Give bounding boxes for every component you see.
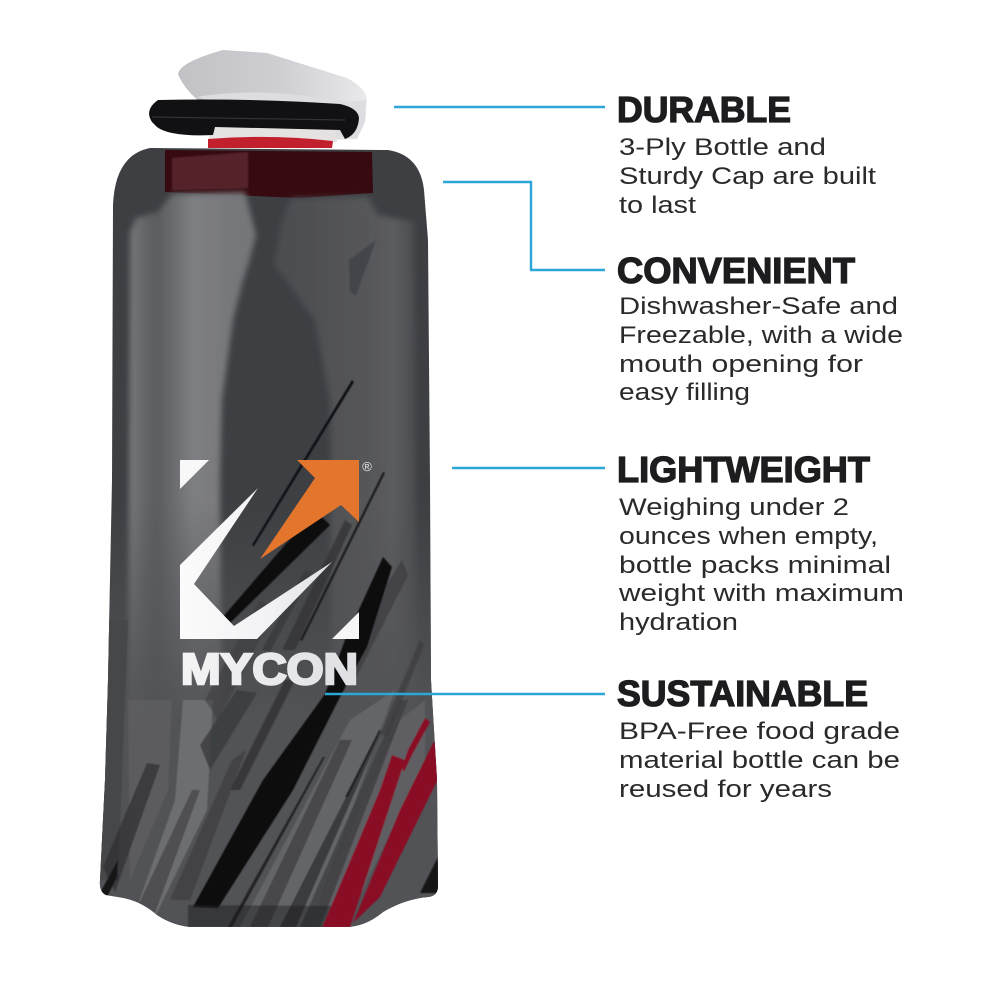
text: convenient: easy filling bbox=[619, 379, 750, 406]
text: durable bbox=[619, 134, 876, 219]
text: sustainable bbox=[619, 718, 900, 803]
registered mark: ® bbox=[362, 459, 372, 474]
lower fade bbox=[106, 542, 434, 720]
text: lightweight: ounces when empty, bbox=[619, 523, 878, 550]
heading: lightweight: LIGHTWEIGHT bbox=[617, 449, 870, 490]
text: lightweight: Weighing under 2 bbox=[619, 494, 849, 521]
streak artwork bbox=[100, 380, 445, 928]
text: sustainable: BPA-Free food grade bbox=[619, 718, 900, 745]
bottle body bbox=[95, 145, 445, 930]
logo orange arrow bbox=[260, 460, 359, 559]
bottle bbox=[95, 50, 445, 930]
left translucent panel bbox=[128, 192, 256, 720]
text: lightweight: bottle packs minimal bbox=[619, 552, 891, 579]
logo white chevron bbox=[180, 488, 332, 639]
text: lightweight: weight with maximum bbox=[618, 580, 904, 607]
logo corner bottom right bbox=[332, 612, 359, 639]
right translucent panel bbox=[275, 194, 416, 658]
text: convenient: Freezable, with a wide bbox=[619, 322, 903, 349]
text: sustainable: reused for years bbox=[619, 776, 832, 803]
text: lightweight bbox=[618, 494, 904, 636]
text: lightweight: hydration bbox=[619, 609, 738, 636]
neck band bbox=[165, 150, 373, 198]
text: durable: 3-Ply Bottle and bbox=[619, 134, 826, 161]
heading: convenient: CONVENIENT bbox=[617, 250, 855, 291]
bottle cap bbox=[149, 50, 367, 148]
text: convenient: Dishwasher-Safe and bbox=[619, 293, 898, 320]
text: sustainable: material bottle can be bbox=[619, 747, 900, 774]
leader line: convenient bbox=[443, 182, 605, 270]
brand logo bbox=[180, 459, 372, 694]
text: durable: Sturdy Cap are built bbox=[619, 163, 876, 190]
leader line: sustainable bbox=[325, 693, 605, 695]
text: durable: to last bbox=[619, 192, 696, 219]
wordmark: MYCON bbox=[181, 645, 358, 694]
block: lightweight bbox=[617, 449, 904, 636]
block: sustainable bbox=[617, 673, 900, 803]
heading: sustainable: SUSTAINABLE bbox=[617, 673, 868, 714]
block: durable bbox=[617, 89, 876, 219]
logo corner top left bbox=[180, 460, 209, 489]
text: convenient bbox=[619, 293, 903, 406]
leader line: lightweight bbox=[452, 467, 605, 469]
text: convenient: mouth opening for bbox=[619, 351, 863, 378]
heading: durable: DURABLE bbox=[617, 89, 791, 130]
leader line: durable bbox=[394, 106, 605, 108]
block: convenient bbox=[617, 250, 903, 406]
